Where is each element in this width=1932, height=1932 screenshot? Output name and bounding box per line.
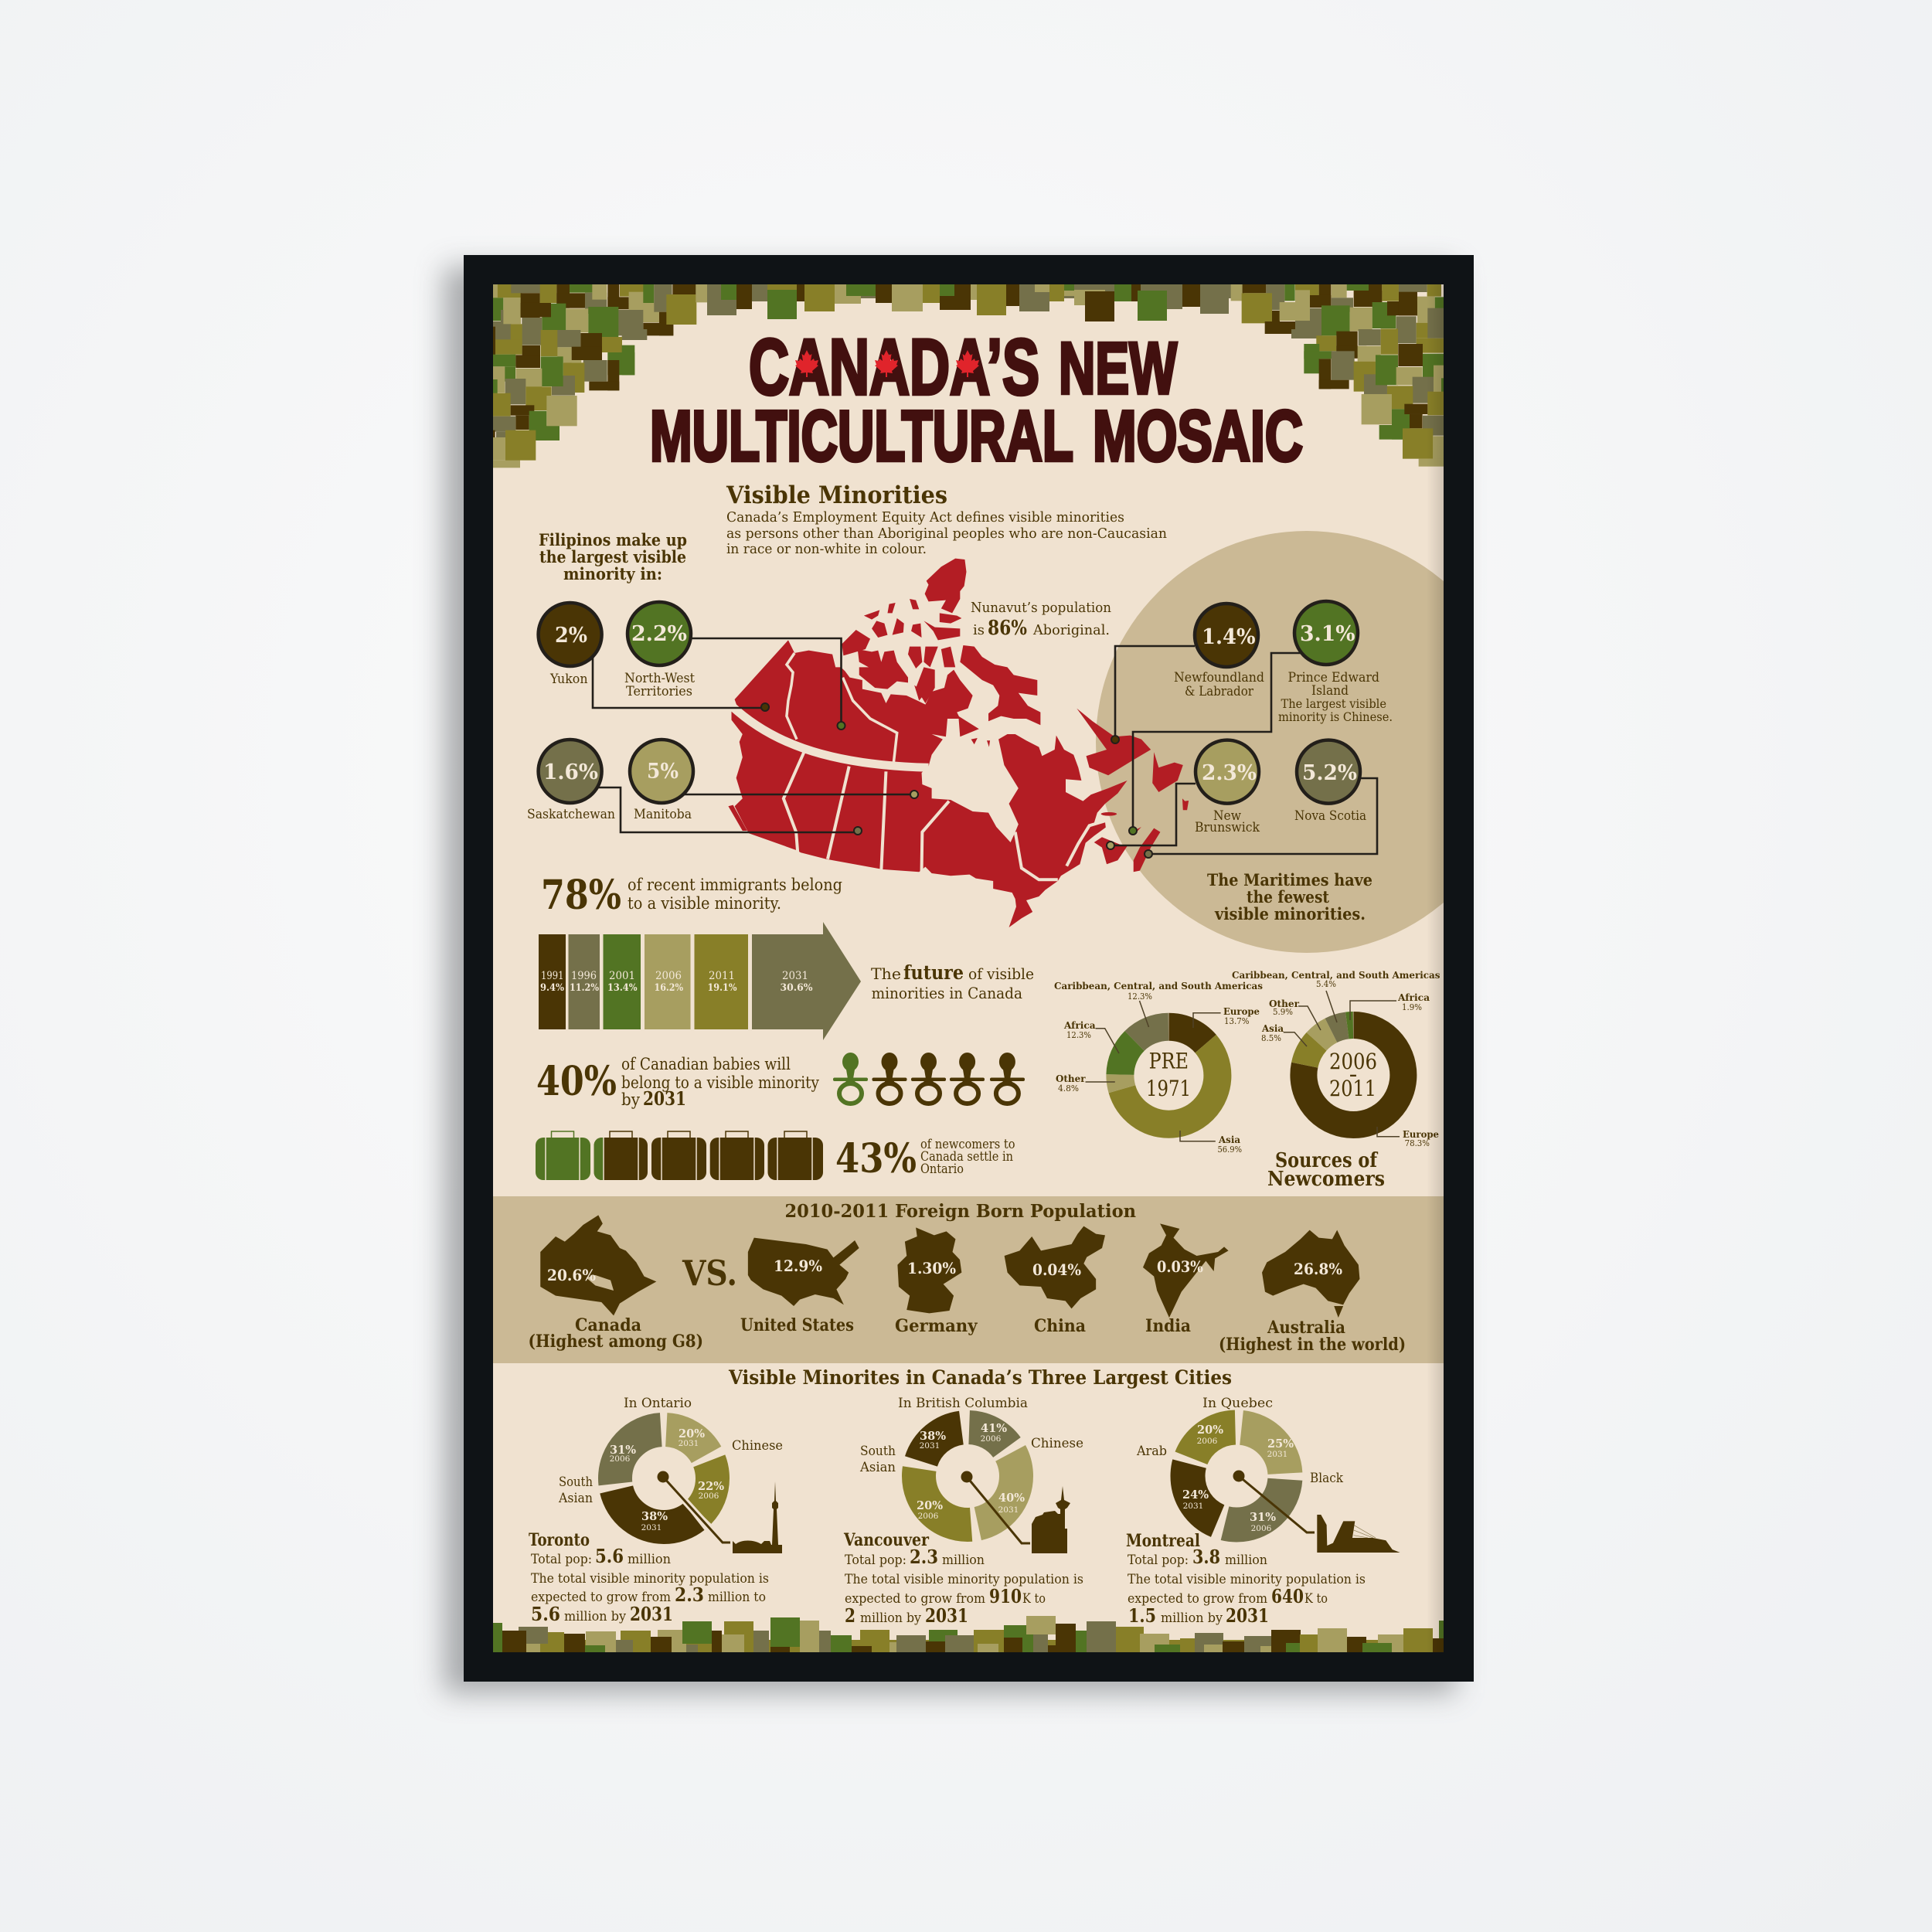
- panel: Montreal: 2031: [1183, 1502, 1203, 1511]
- panel: Toronto: 5.6: [595, 1545, 624, 1567]
- stat: Nova Scotia: Nova Scotia: [1294, 808, 1366, 824]
- stat: Saskatchewan: Saskatchewan: [527, 807, 615, 822]
- country names: Australia: [1267, 1318, 1345, 1338]
- caption: future of visible minorities: of visible: [968, 964, 1034, 983]
- stat: Newfoundland: [1174, 604, 1264, 699]
- Toronto donut: [615, 1430, 713, 1527]
- title: [650, 323, 1303, 476]
- stat: Nova Scotia: 5.2%: [1302, 761, 1357, 785]
- camouflage mosaic: top arch: [493, 284, 1444, 468]
- panel: Montreal: In Quebec: [1202, 1396, 1273, 1411]
- chart: sources PRE 1971 donut: Other: [1056, 1073, 1086, 1084]
- chart: future arrow bars: 13.4%: [607, 982, 638, 994]
- panel: Toronto: 2031: [630, 1603, 673, 1625]
- chart: future arrow bars: 11.2%: [570, 982, 600, 994]
- chart: sources 2006-2011 donut: 5.9%: [1273, 1006, 1293, 1017]
- stat: Prince Edward Island: The largest visible: [1281, 696, 1386, 711]
- stat: 40% babies: by: [621, 1090, 640, 1109]
- chart: future arrow bars: 2001: [609, 970, 635, 982]
- panel: Montreal: 24%: [1182, 1488, 1209, 1502]
- country percentages: 0.04%: [1032, 1260, 1081, 1279]
- stat: Prince Edward Island: [1278, 601, 1393, 724]
- stat: Prince Edward Island: Island: [1311, 683, 1349, 699]
- country silhouettes: [540, 1215, 1359, 1318]
- panel: Vancouver: The total visible minority population is: [845, 1572, 1083, 1587]
- stat: 40% babies: 40%: [536, 1058, 617, 1105]
- panel: Vancouver: 2031: [998, 1505, 1019, 1515]
- country percentages: 1.30%: [907, 1259, 956, 1277]
- stat: Nunavut: is: [973, 622, 985, 638]
- panel: Toronto: 22%: [698, 1480, 724, 1493]
- stat: 78%: [541, 872, 842, 919]
- stat: Yukon: [539, 603, 602, 687]
- panel: Toronto: The total visible minority population is: [531, 1571, 769, 1587]
- stat: North-West Territories: 2.2%: [631, 622, 687, 646]
- stat: Manitoba: [630, 740, 693, 822]
- caption: future of visible minorities: [871, 961, 1034, 1002]
- visible minorities intro: Visible Minorities: [726, 481, 947, 509]
- provincial borders: [732, 653, 1107, 879]
- panel: Vancouver: 2: [845, 1604, 855, 1627]
- chart: future arrow bars: [539, 922, 861, 1040]
- panel: Vancouver: South: [860, 1444, 896, 1459]
- panel: Toronto: 20%: [679, 1427, 705, 1440]
- panel: Vancouver: million: [942, 1553, 985, 1568]
- heading: Filipinos: minority in:: [563, 564, 662, 583]
- country percentages: 20.6%: [547, 1266, 596, 1284]
- icon: Montreal stadium skyline: [1317, 1515, 1400, 1553]
- chart: sources 2006-2011 donut: Caribbean, Central, and South Americas: [1232, 969, 1440, 981]
- panel: Toronto: million by: [564, 1609, 626, 1624]
- title: NEW: [1059, 328, 1177, 410]
- map: Canada: [728, 559, 1189, 927]
- panel: Montreal: K to: [1304, 1591, 1328, 1607]
- stat: 78%: 78%: [541, 872, 621, 919]
- country names: (Highest in the world): [1219, 1335, 1406, 1355]
- panel: Toronto: 5.6: [531, 1603, 560, 1625]
- stat: 40% babies: [536, 1055, 819, 1110]
- country percentages: [547, 1257, 1342, 1284]
- chart: sources PRE 1971 donut: [1054, 980, 1263, 1155]
- stat: Nunavut: 86%: [988, 617, 1027, 640]
- chart: sources 2006-2011 donut: 2011: [1329, 1076, 1376, 1101]
- panel: Toronto: [529, 1396, 783, 1625]
- panel: Vancouver: 910: [989, 1585, 1022, 1607]
- chart: sources PRE 1971 donut: 1971: [1146, 1076, 1191, 1101]
- arctic islands and coastal islands: [728, 559, 1189, 872]
- chart: sources 2006-2011 donut: 78.3%: [1405, 1138, 1430, 1148]
- caption: future of visible minorities: minorities in Canada: [872, 984, 1022, 1002]
- heading: 2010-2011 Foreign Born Population: [785, 1201, 1136, 1222]
- country names: United States: [740, 1315, 854, 1335]
- panel: Vancouver: expected to grow from: [845, 1591, 985, 1607]
- chart: future arrow bars: 2031: [782, 970, 808, 982]
- panel: Toronto: Total pop:: [531, 1552, 592, 1567]
- country names: Germany: [895, 1316, 978, 1336]
- panel: Toronto: expected to grow from: [531, 1590, 671, 1605]
- country names: China: [1034, 1316, 1086, 1336]
- stat: Saskatchewan: 1.6%: [543, 760, 598, 784]
- stat: 40% babies: 2031: [643, 1087, 686, 1110]
- left corner blocks: [493, 284, 718, 468]
- panel: Vancouver: 2031: [925, 1604, 968, 1627]
- stat: Prince Edward Island: Prince Edward: [1287, 670, 1379, 685]
- chart: sources PRE 1971 donut: 13.7%: [1224, 1015, 1250, 1026]
- country names: India: [1145, 1316, 1191, 1336]
- chart: sources PRE 1971 donut: 12.3%: [1128, 991, 1152, 1002]
- stat: Prince Edward Island: 3.1%: [1300, 622, 1355, 646]
- panel: Montreal: Black: [1310, 1471, 1344, 1486]
- heading: sources of newcomers: Sources of: [1275, 1149, 1379, 1172]
- country percentages: 26.8%: [1294, 1260, 1342, 1278]
- stat: Yukon: 2%: [555, 624, 587, 648]
- country percentages: 12.9%: [774, 1257, 822, 1275]
- stat: 43% newcomers: of newcomers to: [920, 1137, 1015, 1151]
- visible minorities intro: [726, 481, 1167, 557]
- icons: pacifiers: [833, 1053, 1025, 1104]
- stat: North-West Territories: Territories: [626, 684, 692, 699]
- panel: Toronto: In Ontario: [624, 1396, 692, 1411]
- title: MULTICULTURAL: [650, 396, 1073, 476]
- panel: Montreal: 640: [1271, 1585, 1304, 1607]
- visible minorities intro: Canada’s Employment Equity Act defines visible minorities: [726, 509, 1124, 526]
- stat: Newfoundland: 1.4%: [1202, 625, 1255, 649]
- icon: Vancouver skyline: [1032, 1486, 1070, 1553]
- panel: Montreal: 25%: [1267, 1437, 1294, 1451]
- camouflage mosaic: bottom strip: [493, 1616, 1444, 1652]
- stat: Manitoba: 5%: [647, 760, 679, 784]
- poster mockup: [423, 249, 1476, 1714]
- panel: Vancouver: 2.3: [910, 1546, 938, 1568]
- Vancouver pointer: [967, 1477, 1030, 1543]
- panel: Montreal: Total pop:: [1128, 1553, 1189, 1568]
- icons: suitcases: [536, 1131, 823, 1180]
- chart: sources PRE 1971 donut: Caribbean, Central, and South Americas: [1054, 980, 1263, 992]
- top strip blocks: [707, 284, 736, 315]
- panel: Montreal: expected to grow from: [1128, 1591, 1267, 1607]
- panel: Vancouver: million by: [860, 1611, 921, 1626]
- panel: Vancouver: 2006: [918, 1512, 939, 1521]
- panel: Vancouver: 40%: [998, 1492, 1025, 1505]
- chart: sources 2006-2011 donut: Asia: [1261, 1022, 1284, 1034]
- chart: sources PRE 1971 donut: 12.3%: [1066, 1029, 1091, 1040]
- chart: sources PRE 1971 donut: 4.8%: [1058, 1083, 1079, 1094]
- chart: sources 2006-2011 donut: 5.4%: [1316, 978, 1336, 989]
- chart: sources 2006-2011 donut: 8.5%: [1261, 1032, 1281, 1043]
- panel: Toronto: 2031: [679, 1439, 699, 1448]
- chart: sources 2006-2011 donut: [1232, 969, 1440, 1148]
- panel: Toronto: 38%: [641, 1510, 668, 1523]
- stat: 43% newcomers: 43%: [835, 1135, 917, 1182]
- title: CANADA’S: [749, 323, 1039, 411]
- black frame: [464, 255, 1474, 1682]
- panel: Toronto: South: [559, 1475, 593, 1490]
- chart: future arrow bars: 2006: [655, 970, 682, 982]
- chart: sources 2006-2011 donut: –: [1349, 1065, 1357, 1083]
- panel: Toronto: 2006: [610, 1454, 631, 1464]
- stat: Nunavut: Aboriginal.: [1032, 622, 1110, 638]
- panel: Montreal: 20%: [1197, 1423, 1223, 1437]
- chart: sources PRE 1971 donut: 56.9%: [1218, 1144, 1242, 1155]
- country names: (Highest among G8): [529, 1332, 703, 1352]
- panel: Vancouver: In British Columbia: [898, 1396, 1028, 1411]
- stat: 43% newcomers: Ontario: [920, 1162, 964, 1176]
- chart: sources 2006-2011 donut: 2006: [1329, 1049, 1377, 1074]
- stat: 40% babies: belong to a visible minority: [621, 1073, 819, 1092]
- callout: Maritimes: [1207, 870, 1372, 923]
- panel: Vancouver: Total pop:: [845, 1553, 906, 1568]
- panel: Vancouver: 20%: [917, 1499, 943, 1512]
- right corner blocks: [1231, 284, 1444, 467]
- country percentages: 0.03%: [1157, 1257, 1203, 1276]
- panel: Toronto: Chinese: [732, 1438, 783, 1454]
- panel: Montreal: Arab: [1136, 1444, 1167, 1459]
- visible minorities intro: in race or non-white in colour.: [726, 541, 927, 557]
- Vancouver donut: [919, 1427, 1016, 1525]
- panel: Montreal: 2006: [1197, 1437, 1218, 1446]
- icon: maple leaves: [795, 350, 979, 377]
- stat: 43% newcomers: [835, 1135, 1015, 1182]
- panel: Montreal: 1.5: [1128, 1604, 1156, 1627]
- heading: Filipinos: [539, 530, 687, 583]
- poster paper: [493, 284, 1444, 1652]
- callout: Maritimes: the fewest: [1247, 887, 1329, 906]
- panel: Montreal: 3.8: [1192, 1546, 1220, 1568]
- icon: Toronto skyline: [733, 1481, 782, 1553]
- panel: Montreal: million: [1225, 1553, 1267, 1568]
- chart: sources 2006-2011 donut: Africa: [1397, 992, 1430, 1003]
- versus label: VS.: [682, 1253, 737, 1294]
- chart: sources PRE 1971 donut: Europe: [1223, 1005, 1260, 1017]
- panel: Vancouver: [843, 1396, 1083, 1627]
- stat: Nunavut: Nunavut’s population: [971, 600, 1111, 616]
- panel: Montreal: The total visible minority population is: [1128, 1572, 1366, 1587]
- chart: future arrow bars: 1991: [541, 970, 564, 982]
- panel: Toronto: 2006: [699, 1492, 719, 1501]
- Montreal donut: [1188, 1427, 1285, 1525]
- panel: maritimes circle: [1096, 531, 1444, 953]
- Toronto text: Toronto: [529, 1530, 590, 1550]
- stat: Newfoundland: Newfoundland: [1174, 670, 1264, 685]
- chart: future arrow bars: 30.6%: [781, 982, 813, 994]
- visible minorities intro: as persons other than Aboriginal peoples who are non-Caucasian: [726, 526, 1167, 542]
- connector lines: [593, 638, 1377, 854]
- panel: Montreal: 2031: [1226, 1604, 1269, 1627]
- stat: Yukon: Yukon: [549, 672, 588, 687]
- stat: 40% babies: of Canadian babies will: [621, 1055, 791, 1073]
- callout: Maritimes: visible minorities.: [1214, 904, 1366, 923]
- stat: New Brunswick: Brunswick: [1195, 820, 1260, 835]
- chart: sources 2006-2011 donut: Other: [1269, 998, 1299, 1009]
- chart: future arrow bars: 1996: [571, 970, 597, 982]
- panel: Toronto: 2.3: [675, 1583, 704, 1606]
- panel: Vancouver: Asian: [859, 1460, 896, 1475]
- heading: three largest cities: Visible Minorites in Canada’s Three Largest Cities: [728, 1366, 1232, 1389]
- caption: future of visible minorities: future: [903, 961, 964, 984]
- panel: Toronto: 2031: [641, 1523, 662, 1532]
- panel: Montreal: million by: [1161, 1611, 1223, 1626]
- panel: Montreal: [1126, 1396, 1400, 1627]
- chart: sources PRE 1971 donut: Africa: [1063, 1019, 1096, 1031]
- caption: future of visible minorities: The: [871, 964, 901, 983]
- stat: North-West Territories: North-West: [624, 671, 695, 686]
- panel: Vancouver: 2031: [920, 1441, 940, 1451]
- Montreal pointer: [1239, 1476, 1315, 1532]
- stat: Prince Edward Island: minority is Chinese.: [1278, 709, 1393, 724]
- stat: North-West Territories: [624, 602, 695, 699]
- chart: future arrow bars: 2011: [709, 970, 735, 982]
- chart: sources 2006-2011 donut: Europe: [1403, 1128, 1439, 1140]
- connector dots: [761, 703, 1152, 858]
- heading: Filipinos: Filipinos make up: [539, 530, 687, 549]
- panel: Toronto: Asian: [558, 1491, 593, 1506]
- heading: sources of newcomers: [1267, 1149, 1385, 1191]
- stat: New Brunswick: 2.3%: [1202, 761, 1257, 785]
- stat: Nova Scotia: [1294, 740, 1366, 824]
- panel: Vancouver: 38%: [920, 1430, 946, 1443]
- panel: Vancouver: Chinese: [1031, 1436, 1083, 1451]
- Montreal text: Montreal: [1126, 1531, 1200, 1551]
- panel: Vancouver: K to: [1022, 1591, 1046, 1607]
- stat: 78%: to a visible minority.: [628, 894, 781, 913]
- panel: Vancouver: 2006: [981, 1434, 1002, 1444]
- chart: future arrow bars: 9.4%: [540, 982, 565, 994]
- chart: sources 2006-2011 donut: 1.9%: [1402, 1002, 1422, 1012]
- chart: future arrow bars: 16.2%: [654, 982, 684, 994]
- panel: Toronto: million: [628, 1552, 671, 1567]
- country names: Canada: [575, 1315, 641, 1335]
- panel: Montreal: 2031: [1267, 1450, 1287, 1459]
- panel: foreign born population band: [493, 1196, 1444, 1363]
- heading: sources of newcomers: Newcomers: [1267, 1168, 1385, 1191]
- Toronto pointer: [663, 1477, 723, 1543]
- stat: Saskatchewan: [527, 740, 615, 822]
- panel: Toronto: million to: [708, 1590, 766, 1605]
- Vancouver text: Vancouver: [843, 1530, 929, 1550]
- chart: sources PRE 1971 donut: PRE: [1149, 1049, 1189, 1074]
- stat: 43% newcomers: Canada settle in: [920, 1149, 1013, 1164]
- panel: Montreal: 2006: [1251, 1524, 1272, 1533]
- panel: Toronto: 31%: [610, 1444, 636, 1457]
- stat: Newfoundland: & Labrador: [1185, 684, 1254, 699]
- chart: sources PRE 1971 donut: Asia: [1218, 1134, 1240, 1145]
- panel: Vancouver: 41%: [981, 1422, 1007, 1435]
- stat: 78%: of recent immigrants belong: [628, 876, 842, 894]
- panel: Montreal: 31%: [1250, 1511, 1276, 1524]
- stat: New Brunswick: [1195, 740, 1260, 835]
- title: MOSAIC: [1093, 396, 1303, 476]
- country names: [529, 1315, 1406, 1355]
- stat: New Brunswick: New: [1213, 808, 1241, 824]
- callout: Maritimes: The Maritimes have: [1207, 870, 1372, 889]
- stat: Nunavut: [971, 600, 1111, 640]
- chart: future arrow bars: 19.1%: [708, 982, 737, 994]
- stat: Manitoba: Manitoba: [634, 807, 692, 822]
- heading: Filipinos: the largest visible: [539, 547, 686, 566]
